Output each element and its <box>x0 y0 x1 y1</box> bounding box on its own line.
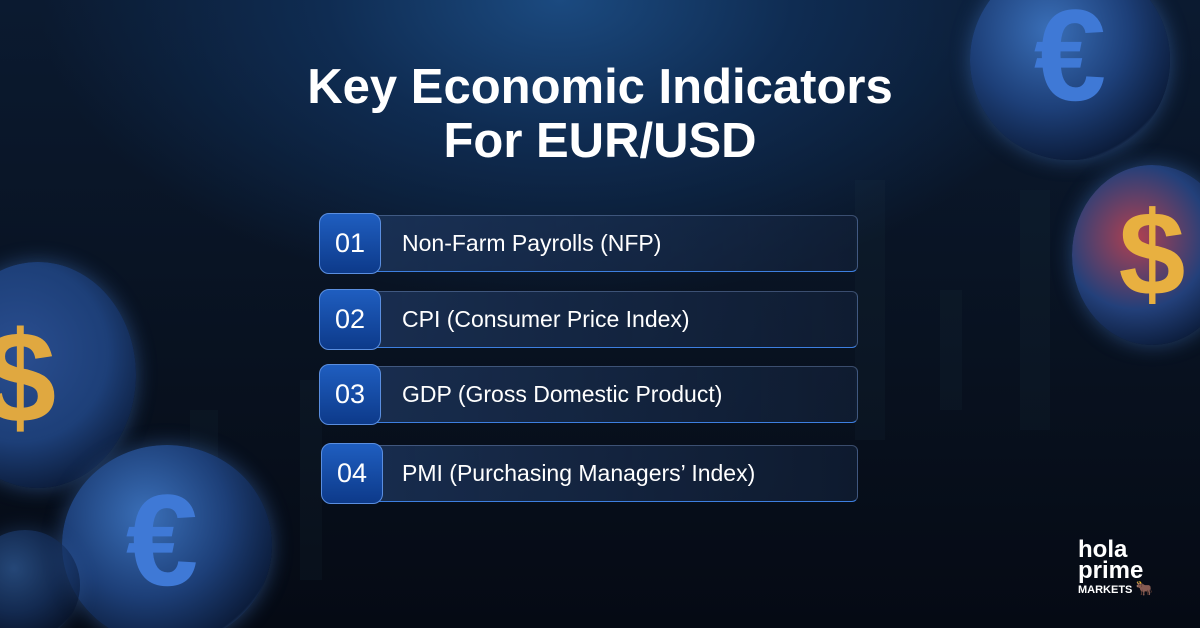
item 01: Non-Farm Payrolls (NFP) <box>402 230 661 256</box>
coin: dollar right <box>1072 165 1200 345</box>
coin: small bottom left <box>0 530 80 628</box>
item 03 <box>319 364 858 425</box>
item 03: GDP (Gross Domestic Product) <box>402 381 722 407</box>
item 01 <box>319 213 858 274</box>
item 02: CPI (Consumer Price Index) <box>402 306 690 332</box>
coin: dollar right: $ <box>1119 187 1185 321</box>
logo: MARKETS 🐂 <box>1078 580 1153 596</box>
coin: euro bottom left <box>62 445 272 628</box>
coin: euro top right <box>970 0 1170 160</box>
coin: dollar left <box>0 262 136 488</box>
title: Key Economic Indicators <box>307 60 893 114</box>
item 04 <box>321 443 858 504</box>
item 04: PMI (Purchasing Managers’ Index) <box>402 460 755 486</box>
item 02: 02 <box>335 304 365 334</box>
title: For EUR/USD <box>443 114 757 168</box>
logo: hola <box>1078 536 1127 563</box>
coin: euro bottom left: € <box>126 467 198 613</box>
title <box>307 60 893 168</box>
item 04: 04 <box>337 458 367 488</box>
item 02 <box>319 289 858 350</box>
item 03: 03 <box>335 379 365 409</box>
logo <box>1078 536 1153 596</box>
logo: prime <box>1078 557 1143 584</box>
item 01: 01 <box>335 228 365 258</box>
